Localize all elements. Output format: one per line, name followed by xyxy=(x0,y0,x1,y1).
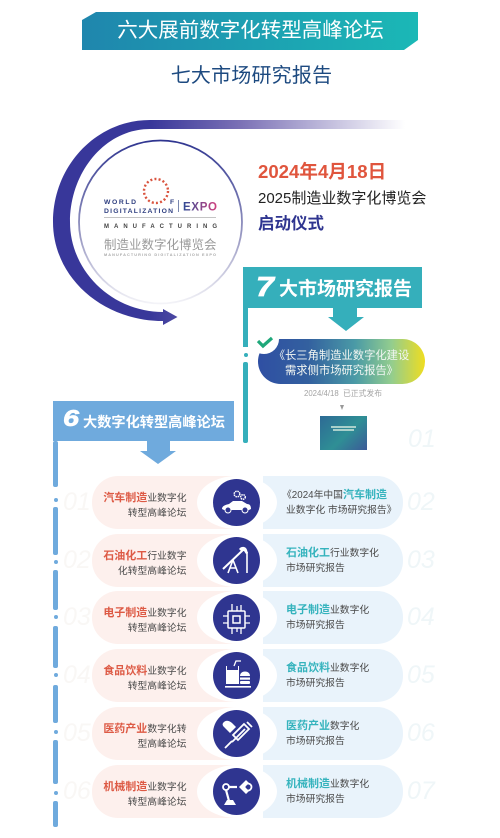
row: pharmaceuticals: 06 xyxy=(407,719,435,747)
row: pharmaceuticals: 医药产业数字化转 xyxy=(103,723,186,735)
logo circle xyxy=(78,140,243,304)
check icon xyxy=(256,336,279,354)
teal timeline xyxy=(243,308,248,443)
row: petrochemical: 化转型高峰论坛 xyxy=(118,566,186,576)
row: pharmaceuticals: 医药产业数字化 xyxy=(286,720,359,732)
logo text: F xyxy=(170,199,174,206)
row: machinery xyxy=(63,765,436,818)
report pill xyxy=(258,339,425,384)
row: food and beverage: 04 xyxy=(63,661,91,689)
row: food and beverage: 食品饮料业数字化 xyxy=(286,662,369,674)
logo text: MANUFACTURING DIGITALIZATION EXPO xyxy=(104,253,216,257)
row: electronics: 市场研究报告 xyxy=(286,620,345,630)
logo text: EXPO xyxy=(183,202,217,214)
logo text: DIGITALIZATION xyxy=(104,208,173,215)
row: pharmaceuticals: 型高峰论坛 xyxy=(138,738,186,750)
row: electronics: 转型高峰论坛 xyxy=(128,622,186,634)
panel: 7 reports header: 大市场研究报告 xyxy=(279,279,412,300)
ghost number 01: 01 xyxy=(408,425,436,453)
row: pharmaceuticals: 市场研究报告 xyxy=(286,736,345,746)
logo text: MANUFACTURING xyxy=(104,224,217,230)
report pill: 《长三角制造业数字化建设 xyxy=(274,350,409,362)
row: food and beverage: 转型高峰论坛 xyxy=(128,680,186,692)
row: food and beverage: 05 xyxy=(407,661,435,689)
row: petrochemical: 02 xyxy=(63,546,91,574)
logo text: 制造业数字化博览会 xyxy=(104,237,217,252)
event date: 2024年4月18日 xyxy=(258,161,386,182)
panel: 6 forums header xyxy=(53,401,234,464)
row: automotive: 《2024年中国汽车制造 xyxy=(282,489,387,501)
row: petrochemical xyxy=(63,534,435,587)
row: petrochemical: 03 xyxy=(407,546,435,574)
row: petrochemical: 石油化工行业数字化 xyxy=(286,547,379,559)
subtitle: 七大市场研究报告 xyxy=(171,65,332,87)
title banner xyxy=(82,12,418,50)
logo text: WORLD xyxy=(104,199,136,206)
title banner: 六大展前数字化转型高峰论坛 xyxy=(117,19,384,42)
row: pharmaceuticals: 05 xyxy=(63,719,91,747)
big arc arrow xyxy=(53,120,396,325)
row: machinery: 转型高峰论坛 xyxy=(128,796,186,808)
row: electronics: 04 xyxy=(407,603,435,631)
row: automotive: 汽车制造业数字化 xyxy=(103,492,186,504)
report thumbnail xyxy=(320,416,367,450)
panel: 7 reports header: 7 xyxy=(256,271,274,302)
row: automotive: 转型高峰论坛 xyxy=(128,508,186,518)
row: automotive xyxy=(63,476,435,529)
row: automotive: 01 xyxy=(63,488,91,516)
logo text xyxy=(104,199,217,257)
logo dot ring xyxy=(144,179,168,203)
row: food and beverage: 食品饮料业数字化 xyxy=(103,665,186,677)
row: machinery: 机械制造业数字化 xyxy=(286,778,369,790)
panel: 6 forums header: 大数字化转型高峰论坛 xyxy=(83,415,225,431)
row: automotive: 02 xyxy=(407,488,435,516)
release date: 2024/4/18 已正式发布 xyxy=(304,389,382,398)
row: food and beverage: 市场研究报告 xyxy=(286,678,345,688)
row: electronics: 电子制造业数字化 xyxy=(103,607,186,619)
row: petrochemical: 石油化工行业数字 xyxy=(103,550,186,562)
report pill: 需求侧市场研究报告》 xyxy=(285,365,398,377)
row: food and beverage xyxy=(63,649,435,702)
row: machinery: 市场研究报告 xyxy=(286,794,345,804)
event label: 启动仪式 xyxy=(258,215,324,233)
row: electronics xyxy=(63,591,435,644)
row: electronics: 电子制造业数字化 xyxy=(286,604,369,616)
row: machinery: 06 xyxy=(63,777,91,805)
row: automotive: 业数字化 市场研究报告》 xyxy=(286,504,396,516)
panel: 7 reports header xyxy=(243,267,422,331)
row: petrochemical: 市场研究报告 xyxy=(286,562,345,574)
row: machinery: 机械制造业数字化 xyxy=(103,781,186,793)
row: pharmaceuticals xyxy=(63,707,435,760)
row: electronics: 03 xyxy=(63,603,91,631)
panel: 6 forums header: 6 xyxy=(63,405,79,431)
event name: 2025制造业数字化博览会 xyxy=(258,190,426,207)
down triangle xyxy=(340,405,344,410)
blue timeline xyxy=(53,441,58,827)
row: machinery: 07 xyxy=(407,777,435,805)
